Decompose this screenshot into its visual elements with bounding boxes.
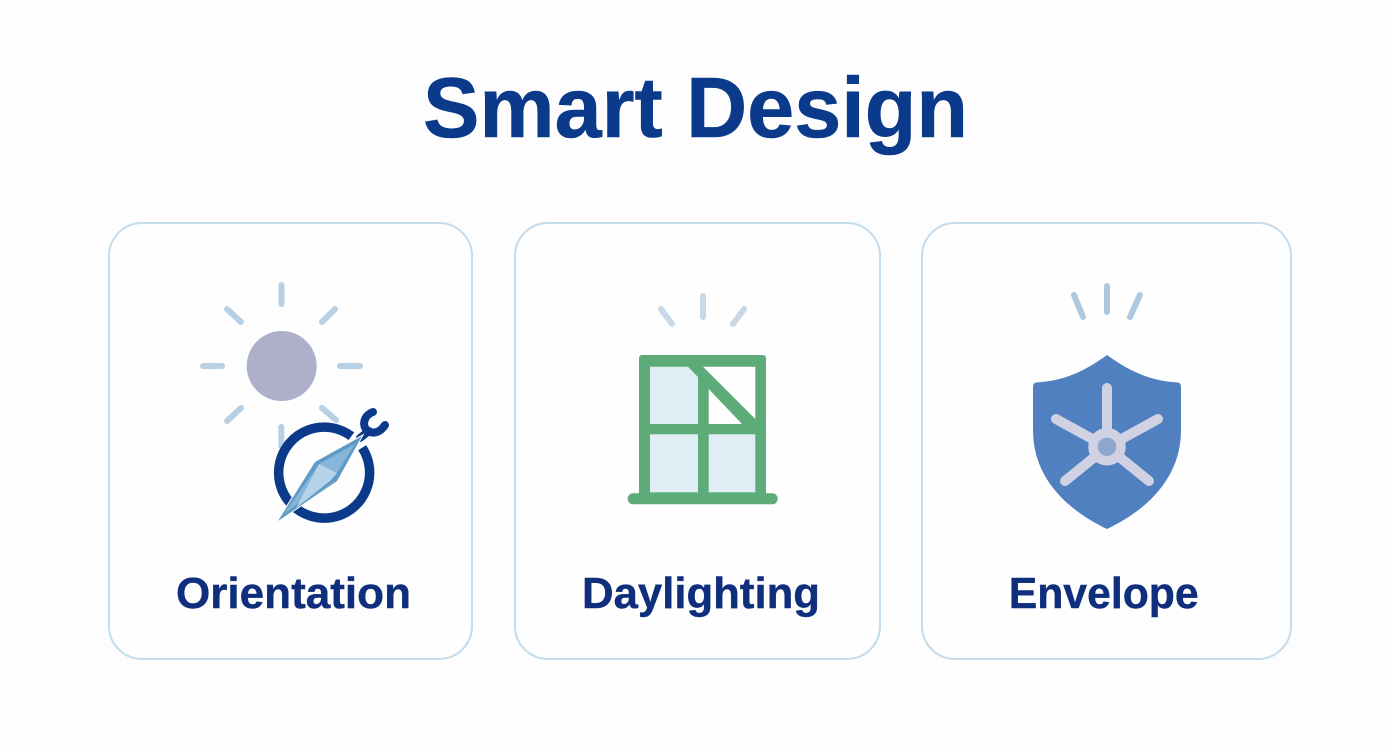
shield body — [1033, 355, 1181, 529]
sun disc — [247, 331, 317, 401]
panel: orientation — [109, 223, 472, 659]
label: envelope: Envelope — [1009, 569, 1199, 618]
sun rays — [203, 285, 360, 446]
card outline: orientation — [109, 223, 472, 659]
title: Smart Design — [423, 61, 968, 156]
card outline: daylighting — [515, 223, 880, 659]
panel: envelope — [922, 223, 1291, 659]
card outline: envelope — [922, 223, 1291, 659]
window frame — [639, 355, 766, 500]
label: daylighting: Daylighting — [582, 569, 820, 618]
shield wheel hub — [1093, 433, 1121, 461]
label: orientation: Orientation — [176, 569, 411, 618]
icon: window — [628, 355, 778, 504]
icon: shield — [1033, 355, 1181, 529]
compass wrench head — [360, 412, 385, 438]
compass ring — [279, 427, 370, 518]
panel: daylighting — [515, 223, 880, 659]
window sill — [628, 493, 778, 504]
icon: compass — [278, 412, 385, 521]
icon: light rays — [661, 296, 744, 324]
icon: sun — [203, 285, 360, 446]
window panes — [650, 367, 698, 424]
compass needle — [278, 436, 362, 521]
icon: light rays — [1074, 286, 1140, 317]
shield wheel spokes — [1056, 388, 1158, 481]
